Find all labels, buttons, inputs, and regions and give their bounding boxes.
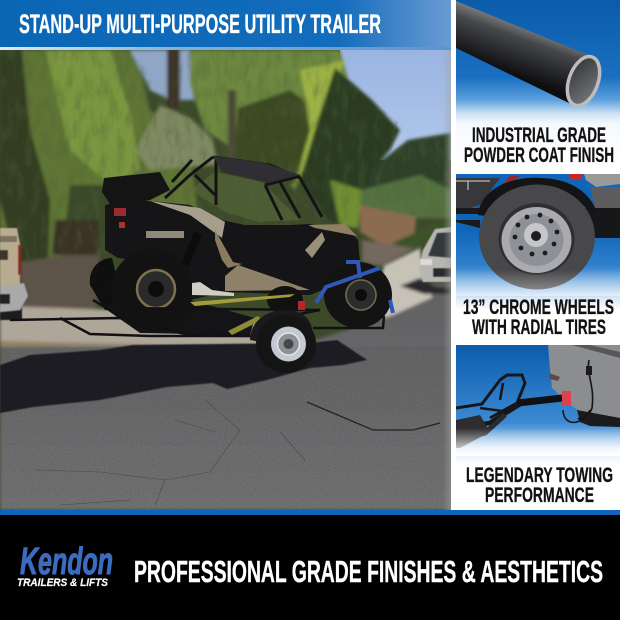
rear far tire: [90, 258, 116, 310]
photo: UTV loaded on trailer: [0, 50, 451, 510]
caption: [464, 299, 614, 334]
front far tire: [267, 286, 303, 314]
trailer wheel: [256, 324, 316, 373]
logo: Kendon: Kendon: [20, 541, 113, 583]
trailer frame: [10, 282, 384, 373]
caption: [466, 467, 612, 502]
deck shadow under tire: [100, 300, 255, 335]
fine road cracks: [35, 400, 305, 505]
road shadow: [0, 340, 367, 413]
suspension: [185, 233, 198, 265]
front tire: [324, 262, 392, 328]
caption: [464, 127, 614, 162]
tan panels: [150, 201, 225, 238]
trailer tongue and hitch: [456, 375, 590, 448]
footer bar: [0, 510, 620, 620]
rear tire: [116, 259, 192, 308]
spare tire: [102, 172, 170, 204]
road crack: [307, 402, 440, 430]
icon: black tube: [456, 1, 606, 110]
header banner: [0, 0, 451, 50]
trailer frame behind wheel: [456, 174, 620, 238]
icon: wheel and radial tire: [479, 184, 595, 290]
right edge fade: [444, 50, 451, 510]
blue tie-down strap: [316, 262, 393, 313]
car rear bumper: [548, 345, 620, 427]
logo: Kendon: TRAILERS & LIFTS: [17, 577, 109, 589]
asphalt texture: [0, 347, 451, 510]
trailer fender: [250, 310, 312, 342]
truck at left edge: [0, 228, 28, 320]
roll cage and roof: [165, 157, 322, 220]
tail lights: [114, 208, 126, 216]
foliage texture: [0, 50, 451, 260]
cab glass view: [190, 172, 300, 222]
title: STAND-UP MULTI-PURPOSE UTILITY TRAILER: [19, 9, 381, 39]
UTV: [90, 156, 393, 335]
panel: powder coat finish: [456, 0, 620, 172]
parked silver car: [419, 227, 451, 282]
body shell: [105, 199, 360, 300]
panel: towing performance: [456, 345, 620, 510]
logo: Kendon: [17, 541, 113, 589]
panel: chrome wheels: [456, 174, 620, 340]
fender: [478, 178, 597, 216]
